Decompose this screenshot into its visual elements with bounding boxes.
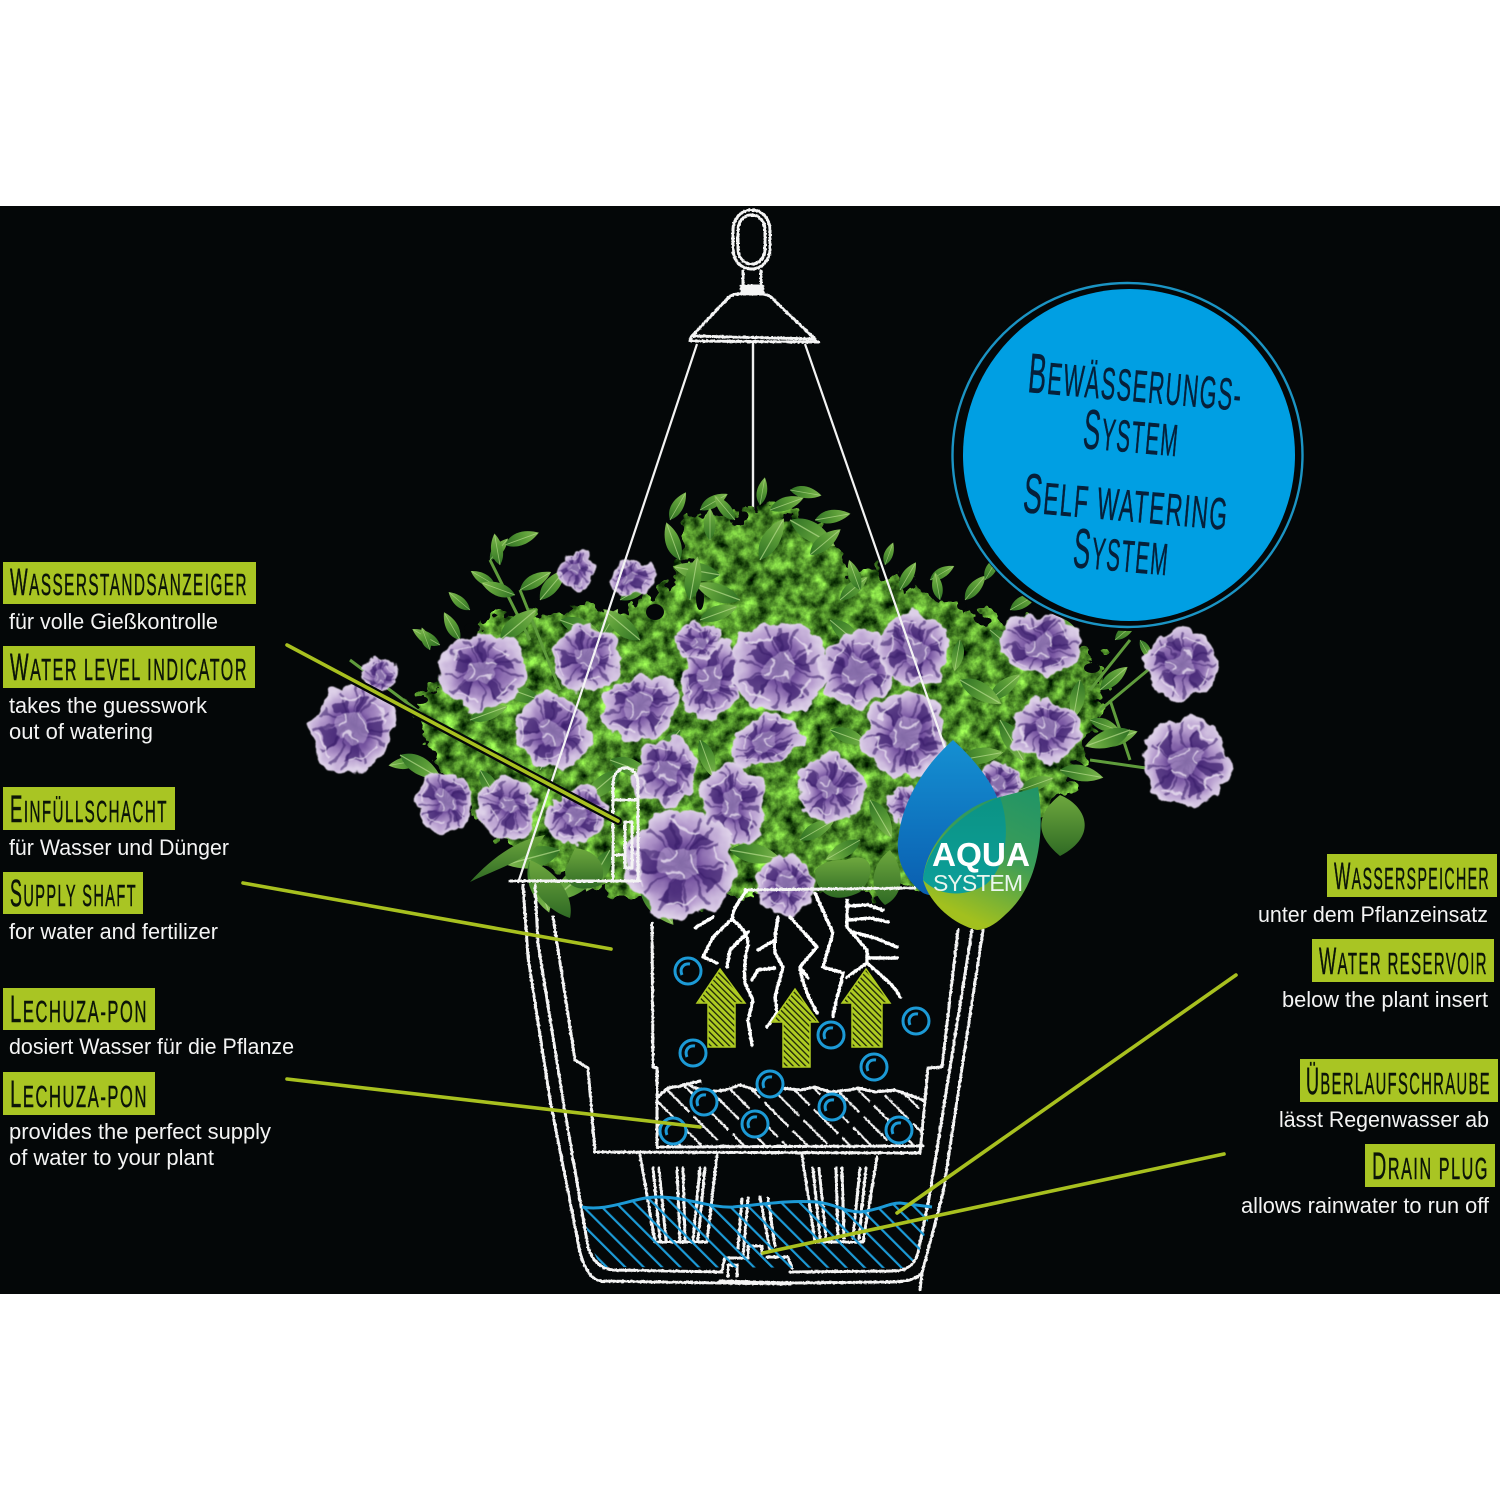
leader line: supply shaft bbox=[243, 883, 611, 949]
label: überlaufschraube bbox=[1279, 1059, 1498, 1132]
foliage mass bbox=[350, 476, 1160, 930]
petunia plant bbox=[299, 476, 1242, 940]
water bubbles bbox=[660, 958, 929, 1144]
label: lechuza-pon en: of water to your plant bbox=[9, 1145, 214, 1170]
leaves bbox=[388, 476, 1156, 930]
water level indicator tube bbox=[596, 768, 640, 881]
blue title circle bbox=[952, 283, 1302, 627]
label: water reservoir: below the plant insert bbox=[1282, 987, 1488, 1012]
hanger and pot sketch bbox=[510, 210, 983, 1290]
label: drain plug bbox=[1241, 1144, 1495, 1218]
label: supply shaft: for water and fertilizer bbox=[9, 919, 218, 944]
circle title text: SYSTEM bbox=[1081, 397, 1182, 468]
leader line: lechuza-pon bbox=[287, 1079, 700, 1127]
plant roots bbox=[695, 890, 900, 1045]
label: lechuza-pon en: LECHUZA-PON bbox=[10, 1074, 148, 1116]
aqua system logo: AQUA bbox=[932, 836, 1030, 873]
large lower leaves bbox=[470, 795, 1085, 918]
black chalkboard background bbox=[0, 206, 1500, 1294]
circle title text: SELF WATERING bbox=[1021, 461, 1232, 542]
label: supply shaft: SUPPLY SHAFT bbox=[10, 873, 137, 915]
centre hanging wire bbox=[752, 343, 754, 580]
purple petunia flowers bbox=[299, 546, 1242, 940]
label: supply shaft bbox=[3, 872, 218, 944]
plant insert bbox=[652, 923, 923, 1147]
label: lechuza-pon de bbox=[3, 988, 294, 1059]
leader line: drain plug bbox=[763, 1154, 1224, 1253]
aqua system logo bbox=[898, 740, 1041, 930]
hanging wires bbox=[518, 344, 945, 883]
label: wasserspeicher: unter dem Pflanzeinsatz bbox=[1258, 902, 1488, 927]
outer pot walls bbox=[510, 881, 983, 1290]
label: drain plug: allows rainwater to run off bbox=[1241, 1193, 1490, 1218]
label: water level indicator: WATER LEVEL INDICATOR bbox=[10, 647, 248, 689]
label: überlaufschraube: lässt Regenwasser ab bbox=[1279, 1107, 1489, 1132]
label: wasserstandsanzeiger bbox=[3, 562, 256, 634]
label: wasserspeicher bbox=[1258, 854, 1497, 927]
label: lechuza-pon de: LECHUZA-PON bbox=[10, 989, 148, 1031]
label: water level indicator bbox=[3, 646, 255, 744]
label: einfüllschacht: EINFÜLLSCHACHT bbox=[10, 789, 168, 831]
label: water reservoir bbox=[1282, 939, 1494, 1012]
soil layer bbox=[658, 1081, 923, 1146]
leader line: water level indicator bbox=[287, 645, 618, 821]
leader line: water reservoir bbox=[897, 975, 1236, 1213]
green up arrows bbox=[697, 969, 890, 1067]
label: lechuza-pon en: provides the perfect supply bbox=[9, 1119, 271, 1144]
label: water level indicator: out of watering bbox=[9, 719, 153, 744]
circle title text: BEWÄSSERUNGS- bbox=[1026, 341, 1246, 423]
reservoir feet and drain bbox=[640, 1155, 877, 1283]
circle title text: SYSTEM bbox=[1071, 516, 1172, 587]
label: lechuza-pon de: dosiert Wasser für die Pflanze bbox=[9, 1034, 294, 1059]
label: wasserstandsanzeiger: WASSERSTANDSANZEIGER bbox=[10, 562, 248, 604]
stems to outer flowers bbox=[350, 560, 1160, 770]
label: water level indicator: takes the guesswork bbox=[9, 693, 208, 718]
hanger ring and cap bbox=[690, 210, 819, 342]
label: lechuza-pon en bbox=[3, 1072, 271, 1170]
water reservoir with hatching bbox=[582, 1197, 932, 1268]
aqua system logo: SYSTEM bbox=[933, 870, 1023, 896]
label: einfüllschacht bbox=[3, 787, 229, 860]
label: wasserstandsanzeiger: für volle Gießkontrolle bbox=[9, 609, 218, 634]
label: einfüllschacht: für Wasser und Dünger bbox=[9, 835, 229, 860]
circle title text bbox=[1021, 341, 1246, 587]
